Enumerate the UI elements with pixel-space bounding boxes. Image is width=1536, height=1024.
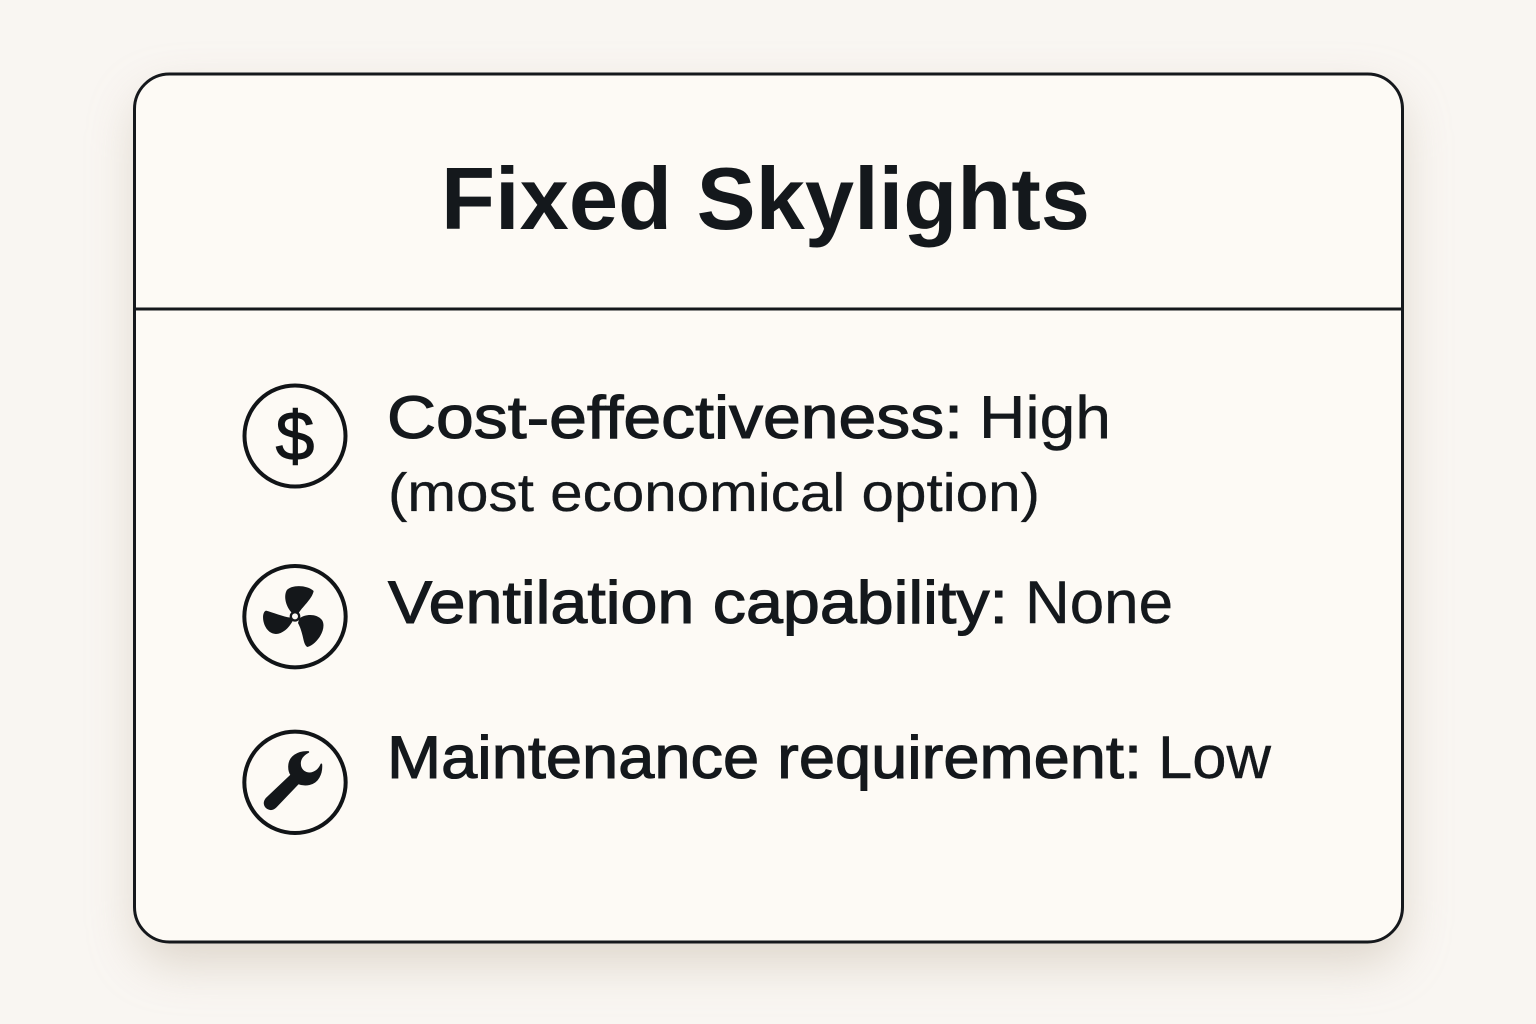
icon: fan <box>244 566 346 667</box>
row: maintenance <box>244 724 1272 833</box>
icon: wrench <box>244 732 346 833</box>
text: cost-effectiveness high: High <box>979 384 1111 451</box>
text: cost-effectiveness high <box>387 384 1111 523</box>
text: cost-effectiveness high: (most economical option) <box>388 463 1040 523</box>
panel: card <box>134 74 1402 942</box>
text: ventilation none: None <box>1025 569 1173 636</box>
icon: dollar: $ <box>276 397 314 475</box>
title: Fixed Skylights <box>441 149 1090 248</box>
text: ventilation none: Ventilation capability: <box>388 569 1008 636</box>
card shadow <box>136 94 1402 964</box>
text: maintenance low: Maintenance requirement: <box>387 724 1142 791</box>
text: maintenance low: Low <box>1158 724 1272 791</box>
text: cost-effectiveness high: Cost-effectiveness: <box>387 384 963 451</box>
icon: dollar <box>244 386 346 486</box>
row: cost-effectiveness <box>244 384 1111 523</box>
row: ventilation <box>244 566 1173 667</box>
